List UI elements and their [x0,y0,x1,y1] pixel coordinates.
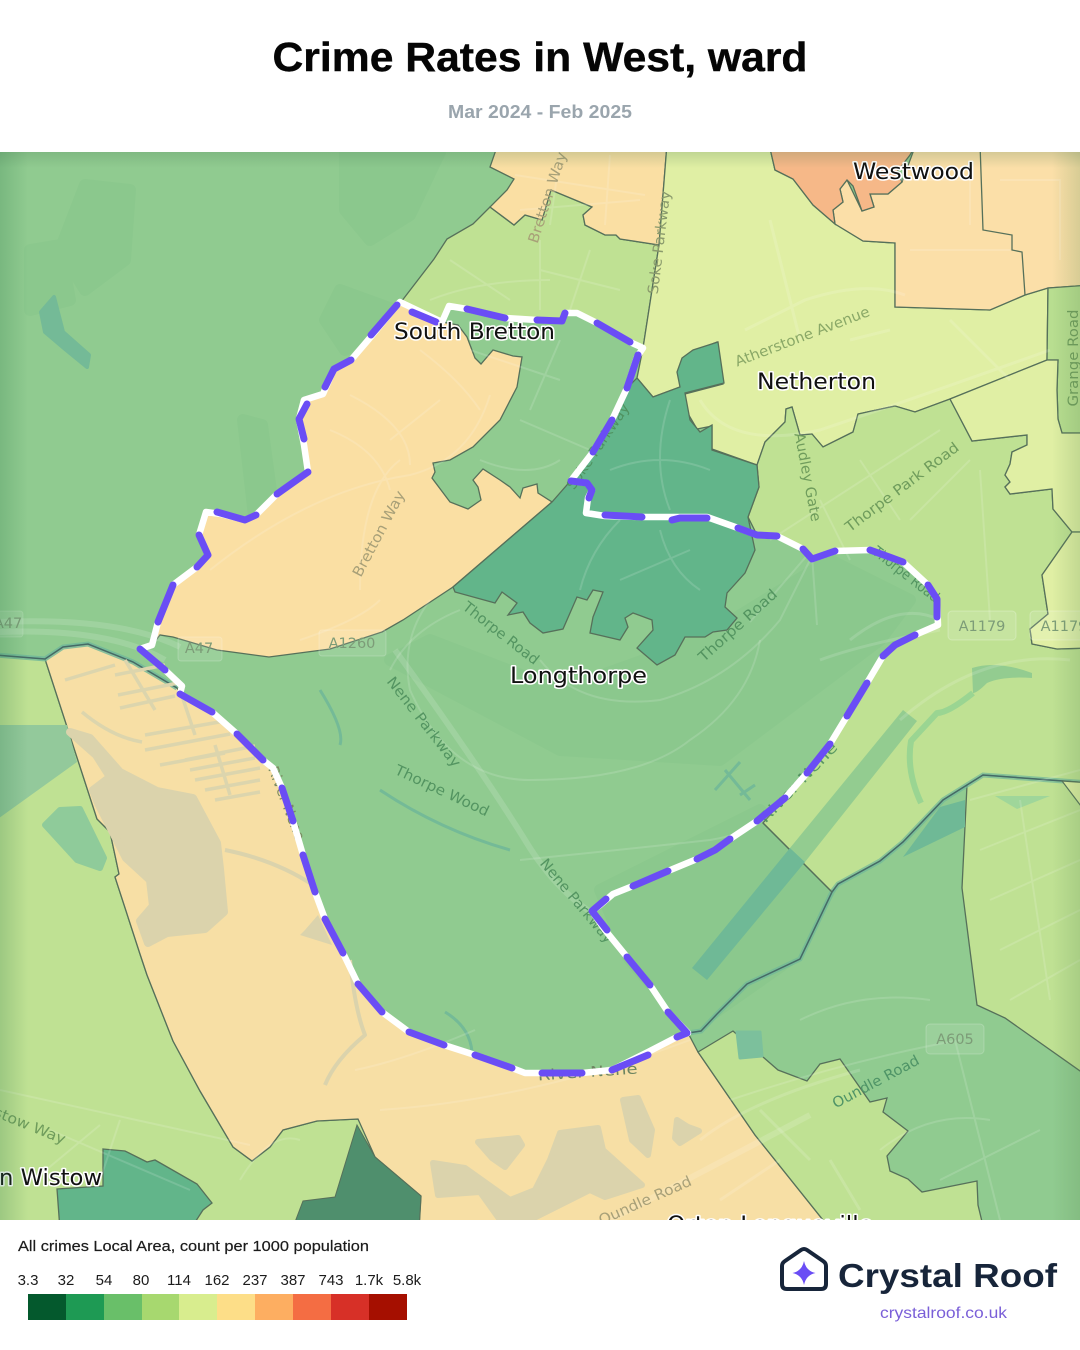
place labels: n Wistow [0,1166,102,1191]
road labels: River Nene [264,764,307,843]
road labels: Bretton Way [350,488,409,580]
zone: far-east pale [1030,532,1080,649]
woodland shading [30,152,910,1030]
place labels: Westwood [853,160,974,185]
zone: bottom dark green [292,1125,421,1230]
road labels: Thorpe Road [459,599,542,668]
legend title: All crimes Local Area, count per 1000 population [18,1238,369,1255]
zone: dark green Longthorpe north [453,342,759,665]
road labels: Nene Parkway [383,674,464,771]
river east glow [688,775,1080,1033]
zone: South Bretton beige [152,302,552,657]
website link: crystalroof.co.uk [880,1305,1008,1322]
zone: east pale [950,360,1080,532]
legend values: 1.7k [355,1272,384,1289]
water and rowing lake [0,297,1050,1220]
legend values: 387 [280,1272,306,1289]
zone: lower-left beige [45,644,831,1230]
zone: bottom centre-right light green [698,1031,984,1230]
gravel pit strips [65,660,260,800]
ward boundary: purple dashes [140,305,937,1073]
zone: Thorpe Park [748,399,1080,892]
icon: house with star [782,1249,826,1289]
ward boundary: white line [140,302,938,1073]
place labels: Netherton [757,370,876,395]
zone: Westwood beige [833,144,1080,310]
boundary stub [763,823,832,892]
zone: Netherton [637,144,1048,465]
road labels: Soke Parkway [564,400,634,493]
road labels: Oundle Road [830,1053,922,1112]
road labels: Atherstone Avenue [733,304,872,370]
zone: Westwood orange [770,152,912,226]
road labels: River Nene [537,1062,638,1084]
title: Crime Rates in West, ward [272,34,808,80]
divider beige lines [980,144,1025,295]
legend values [18,1272,422,1289]
road labels: Bretton Way [526,150,571,245]
legend values: 54 [96,1272,112,1289]
legend colour scale [28,1294,407,1320]
subtitle: date range: Mar 2024 - Feb 2025 [448,102,632,122]
road shields: A1179 [959,619,1005,635]
road shields [0,611,1080,1054]
wordmark: Crystal Roof [838,1257,1058,1294]
road labels: Thorpe Road [868,543,942,606]
road labels: Nene Parkway [536,856,616,947]
road shields: A605 [936,1032,974,1048]
map edge shading [0,152,1080,1220]
road labels: River Nene [757,740,841,827]
road labels: Oundle Road [596,1174,694,1229]
river east line [688,775,1080,1033]
road shields: A47 [185,641,213,657]
logo: Crystal Roof [782,1249,1058,1322]
river line [0,644,177,688]
zone: bottom-left light green [0,658,370,1220]
zone: Bretton north light green [401,190,659,348]
road labels: Soke Parkway [646,190,674,295]
legend [18,1238,422,1320]
zone: Grange Road strip [1047,285,1080,433]
zone: southeast light green [962,775,1080,1078]
legend values: 3.3 [18,1272,38,1289]
road labels [0,150,1080,1229]
zone: Bretton north beige [490,144,667,245]
legend values: 114 [167,1272,191,1289]
road network [0,155,1080,1220]
zone: bottom-left green [57,1149,212,1230]
legend values: 5.8k [393,1272,422,1289]
legend values: 80 [133,1272,149,1289]
place labels [0,160,974,1238]
road labels: Thorpe Wood [391,762,491,820]
legend values: 162 [204,1272,230,1289]
road labels: Thorpe Road [695,587,781,666]
road labels: Audley Gate [790,432,823,523]
lakes in beige [70,732,224,943]
legend values: 237 [242,1272,268,1289]
place labels: South Bretton [394,320,555,345]
legend values: 743 [318,1272,344,1289]
place labels: Orton Longueville [667,1213,873,1238]
road shields: A1260 [329,636,375,652]
place labels: Longthorpe [510,664,647,689]
river glow west [0,644,177,688]
legend values: 32 [58,1272,74,1289]
corner pale zone [1061,780,1080,806]
road labels: Thorpe Park Road [842,440,963,536]
